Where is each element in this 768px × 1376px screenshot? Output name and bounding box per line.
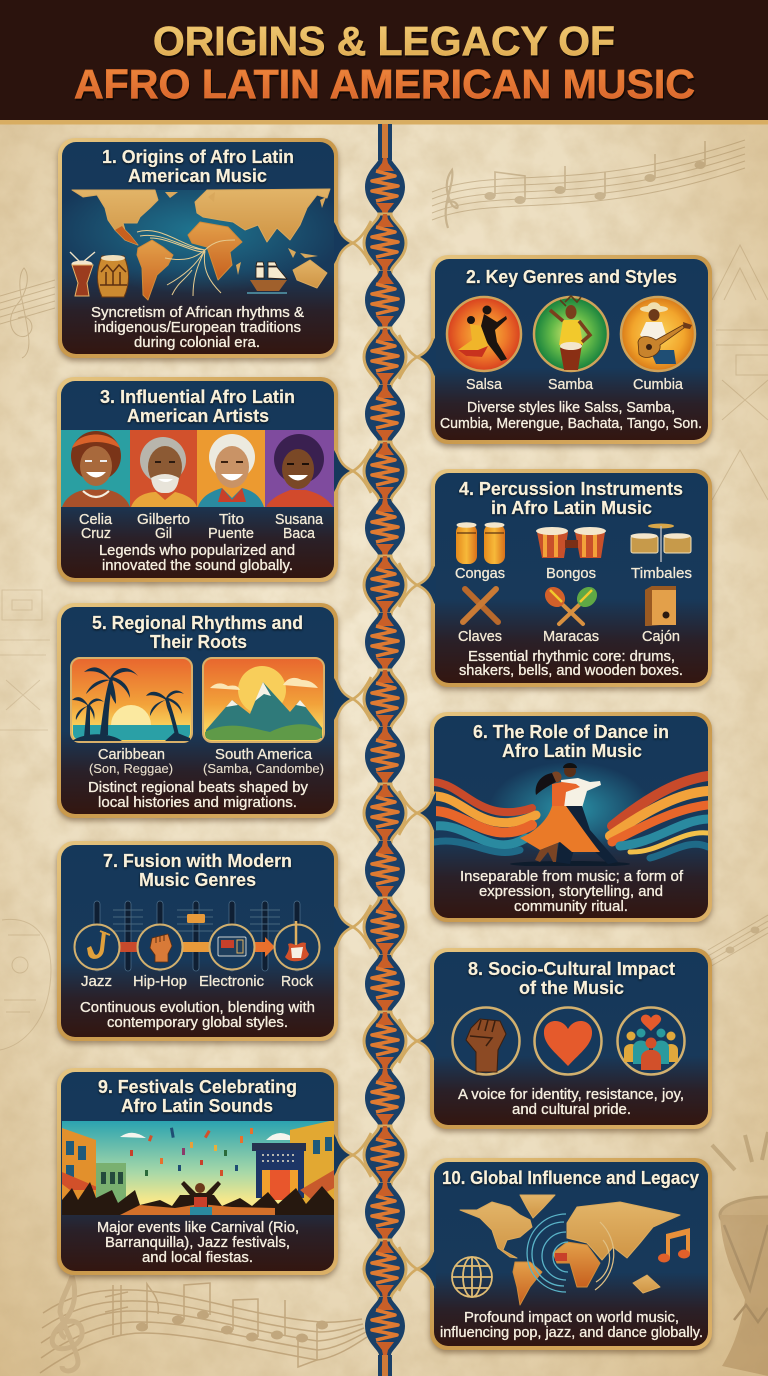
- body text 3: [99, 543, 295, 574]
- icon: electronic console: [210, 924, 254, 970]
- background tribal pattern left: [0, 590, 50, 730]
- icon: rock guitar: [274, 921, 320, 970]
- heading 1: [102, 146, 294, 186]
- body text 7: Continuous evolution, blending with: [80, 1000, 315, 1016]
- title: ORIGINS & LEGACY OF: [153, 18, 615, 64]
- title: AFRO LATIN AMERICAN MUSIC: [74, 61, 695, 107]
- artist names: Tito: [219, 512, 244, 528]
- connector: panel 2: [399, 335, 436, 379]
- heading 7: [103, 850, 292, 890]
- heading 1: American Music: [128, 165, 267, 186]
- tier one labels: Timbales: [631, 566, 692, 582]
- header band: [0, 0, 768, 124]
- heading 5: 5. Regional Rhythms and: [92, 612, 303, 633]
- body text 6: [460, 869, 684, 915]
- body text 5: local histories and migrations.: [98, 795, 297, 811]
- heading 8: 8. Socio-Cultural Impact: [468, 958, 675, 979]
- panel 5: regional rhythms: [57, 603, 338, 818]
- icon: hip-hop fist: [138, 924, 182, 970]
- tier two labels: [458, 629, 680, 645]
- heading 9: Afro Latin Sounds: [121, 1095, 273, 1116]
- fusion labels: Electronic: [199, 974, 264, 990]
- body text 5: Distinct regional beats shaped by: [88, 780, 309, 796]
- body text 9: [97, 1220, 299, 1266]
- body text 2: [440, 400, 702, 432]
- body text 4: Essential rhythmic core: drums,: [468, 649, 675, 665]
- icon: community: [618, 1008, 684, 1074]
- heading 6: Afro Latin Music: [502, 740, 642, 761]
- fusion labels: Rock: [281, 974, 314, 990]
- body text 8: and cultural pride.: [512, 1102, 631, 1118]
- icon: drums: [70, 252, 128, 297]
- region labels: (Samba, Candombe): [203, 761, 324, 776]
- icon: cajon: [645, 586, 676, 626]
- background music notes top right: [432, 140, 745, 228]
- portrait: Gilberto Gil: [130, 430, 197, 507]
- connector: panel 4: [399, 563, 436, 607]
- portrait: Susana Baca: [265, 430, 334, 507]
- tier two labels: Cajón: [642, 629, 680, 645]
- body text 9: Major events like Carnival (Rio,: [97, 1220, 299, 1236]
- panel 9: festivals: [57, 1068, 338, 1275]
- panel 7: fusion: [57, 841, 338, 1041]
- scene: Caribbean: [71, 658, 192, 742]
- icon: samba dancer: [534, 296, 608, 371]
- icon: fist: [452, 1008, 520, 1074]
- icon: cumbia guitarist: [621, 297, 695, 371]
- body text 6: community ritual.: [514, 899, 628, 915]
- body text 2: Diverse styles like Salss, Samba,: [467, 400, 675, 416]
- connector: panel 1: [334, 221, 371, 265]
- artist names: Susana: [275, 512, 324, 528]
- body text 8: A voice for identity, resistance, joy,: [458, 1087, 684, 1103]
- background aztec pattern right: [712, 245, 768, 500]
- icon: timbales: [630, 524, 691, 562]
- body text 10: [440, 1310, 703, 1341]
- artist names: Baca: [283, 526, 316, 542]
- body text 7: [80, 1000, 315, 1031]
- title: [74, 18, 695, 107]
- heading 7: 7. Fusion with Modern: [103, 850, 292, 871]
- icon: heart: [534, 1008, 602, 1074]
- world map with migration roots: [62, 189, 334, 305]
- body text 1: Syncretism of African rhythms &: [91, 305, 304, 321]
- heading 9: 9. Festivals Celebrating: [98, 1076, 297, 1097]
- festival scene: [62, 1120, 334, 1215]
- icon: claves: [463, 589, 498, 622]
- fusion labels: Jazz: [81, 974, 112, 990]
- dance illustration with colour waves: [434, 762, 708, 867]
- body text 1: during colonial era.: [134, 335, 260, 351]
- connector: panel 5: [334, 677, 371, 721]
- heading 1: 1. Origins of Afro Latin: [102, 146, 294, 167]
- genre labels: Salsa: [466, 377, 503, 393]
- genre labels: Cumbia: [633, 377, 684, 393]
- artist names: Cruz: [81, 526, 111, 542]
- genre labels: Samba: [548, 377, 594, 393]
- connector: panel 10: [399, 1247, 436, 1291]
- panel 3: artists: [57, 377, 338, 582]
- body text 10: Profound impact on world music,: [464, 1310, 679, 1326]
- body text 10: influencing pop, jazz, and dance globally.: [440, 1325, 703, 1341]
- body text 1: indigenous/European traditions: [94, 320, 301, 336]
- icon: salsa dancers: [447, 297, 521, 371]
- heading 3: [100, 386, 295, 426]
- body text 5: [88, 780, 309, 811]
- heading 4: 4. Percussion Instruments: [459, 478, 683, 499]
- connector: panel 7: [334, 905, 371, 949]
- region labels: Caribbean: [98, 747, 165, 763]
- heading 5: [92, 612, 303, 652]
- panel 1: origins: [58, 138, 338, 358]
- artist names: Gil: [155, 526, 172, 542]
- scene: South America: [203, 658, 324, 742]
- heading 6: 6. The Role of Dance in: [473, 721, 669, 742]
- tier one labels: [455, 566, 692, 582]
- region labels: South America: [215, 747, 313, 763]
- heading 6: [473, 721, 669, 761]
- central timeline spine: [364, 124, 406, 1376]
- artist names: [79, 512, 324, 542]
- heading 8: [468, 958, 675, 998]
- connector: panel 3: [334, 449, 371, 493]
- body text 2: Cumbia, Merengue, Bachata, Tango, Son.: [440, 416, 702, 432]
- icon: globe: [452, 1257, 492, 1297]
- panel 6: dance: [430, 712, 712, 922]
- artist names: Puente: [208, 526, 254, 542]
- region labels: (Son, Reggae): [89, 761, 173, 776]
- panel 2: genres: [431, 255, 712, 444]
- body text 3: innovated the sound globally.: [102, 558, 293, 574]
- icon: maracas: [541, 583, 601, 624]
- body text 1: [91, 305, 304, 351]
- region labels: [89, 747, 324, 776]
- background treble clef left: [0, 268, 55, 358]
- fusion labels: [81, 974, 314, 990]
- heading 10: 10. Global Influence and Legacy: [442, 1167, 700, 1188]
- tier two labels: Maracas: [543, 629, 599, 645]
- panel 8: socio-cultural impact: [430, 948, 712, 1129]
- icon: music notes: [658, 1228, 690, 1262]
- heading 4: [459, 478, 683, 518]
- body text 8: [458, 1087, 684, 1118]
- background drum bottom right: [712, 1132, 768, 1376]
- icon: jazz saxophone: [74, 924, 120, 970]
- world map with sound ripples: [460, 1195, 680, 1305]
- background music staff bottom left: [40, 1276, 367, 1373]
- tier two labels: Claves: [458, 629, 502, 645]
- icon: ship: [247, 262, 287, 293]
- body text 7: contemporary global styles.: [107, 1015, 288, 1031]
- heading 9: [98, 1076, 297, 1116]
- artist names: Gilberto: [137, 512, 190, 528]
- body text 4: shakers, bells, and wooden boxes.: [459, 663, 683, 679]
- heading 3: 3. Influential Afro Latin: [100, 386, 295, 407]
- connector: panel 8: [399, 1019, 436, 1063]
- panel 4: percussion: [431, 469, 712, 687]
- heading 3: American Artists: [127, 405, 269, 426]
- panel 10: global influence: [430, 1158, 712, 1350]
- mixer faders: [94, 901, 300, 971]
- genre labels: [466, 377, 684, 393]
- heading 8: of the Music: [519, 977, 624, 998]
- heading 5: Their Roots: [150, 631, 247, 652]
- body text 6: expression, storytelling, and: [479, 884, 663, 900]
- artist names: Celia: [79, 512, 113, 528]
- body text 4: [459, 649, 683, 679]
- connector: panel 9: [334, 1133, 371, 1177]
- heading 7: Music Genres: [139, 869, 256, 890]
- background mask left: [0, 919, 51, 1050]
- body text 3: Legends who popularized and: [99, 543, 295, 559]
- background staff right: [708, 915, 768, 968]
- portrait: Celia Cruz: [61, 430, 130, 507]
- tier one labels: Bongos: [546, 566, 596, 582]
- body text 9: Barranquilla), Jazz festivals,: [105, 1235, 290, 1251]
- fusion labels: Hip-Hop: [133, 974, 187, 990]
- body text 6: Inseparable from music; a form of: [460, 869, 684, 885]
- heading 4: in Afro Latin Music: [491, 497, 652, 518]
- body text 9: and local fiestas.: [142, 1250, 253, 1266]
- tier one labels: Congas: [455, 566, 505, 582]
- icon: congas: [456, 522, 505, 564]
- portrait: Tito Puente: [197, 430, 265, 507]
- heading 2: 2. Key Genres and Styles: [466, 266, 677, 287]
- icon: bongos: [536, 527, 606, 558]
- connector: panel 6: [399, 791, 436, 835]
